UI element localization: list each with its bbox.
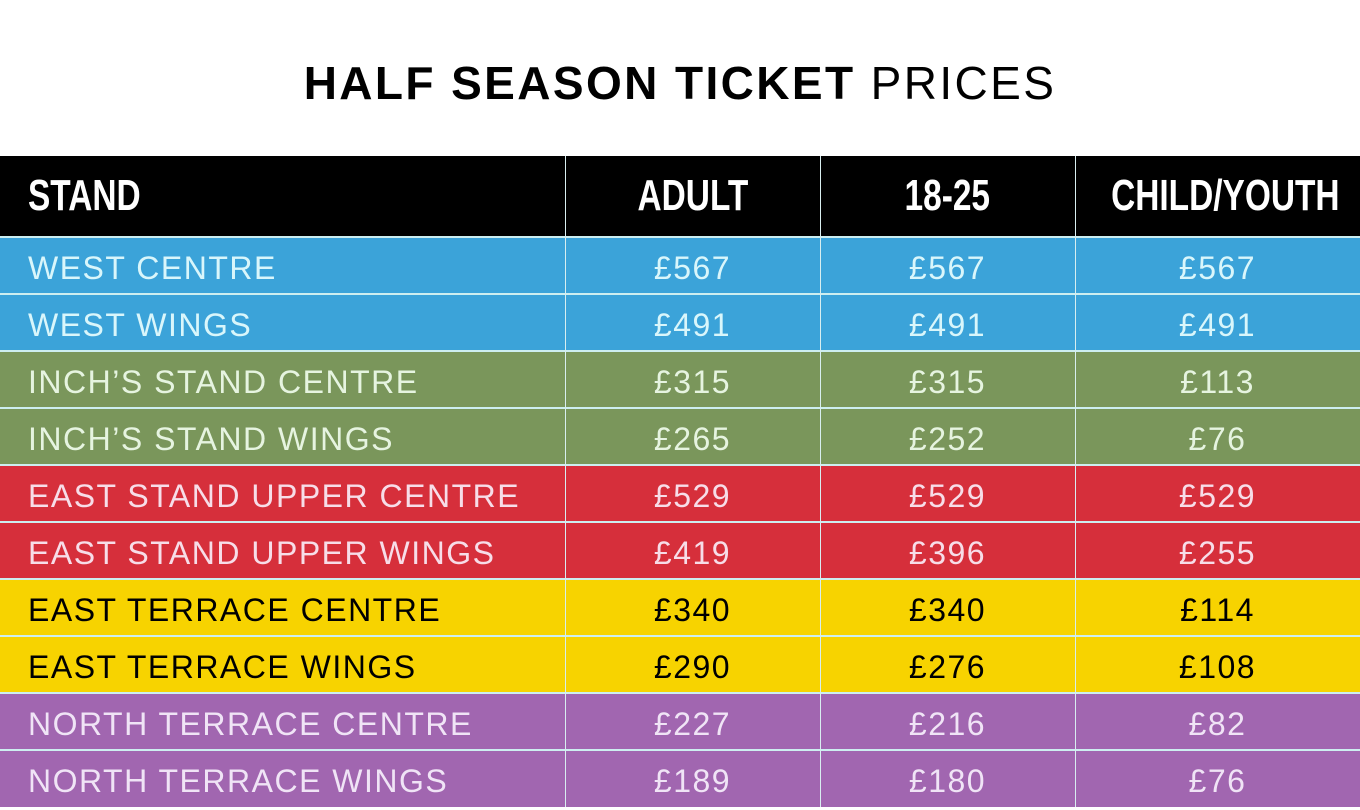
row: north terrace centre: £216 — [909, 706, 986, 742]
row: east terrace wings: £290 — [654, 649, 731, 685]
row: inch's wings: £76 — [1189, 421, 1246, 457]
row: inch's centre: £315 — [909, 364, 986, 400]
row: east terrace centre: £340 — [909, 592, 986, 628]
row: east terrace wings: £108 — [1179, 649, 1256, 685]
row: east upper wings: £419 — [654, 535, 731, 571]
row: inch's wings: INCH’S STAND WINGS — [28, 421, 394, 457]
row: west wings: £491 — [1179, 307, 1256, 343]
row: east upper centre: £529 — [654, 478, 731, 514]
row: west centre — [0, 236, 1360, 293]
header row: STAND — [28, 171, 141, 220]
row: west wings — [0, 293, 1360, 350]
row: east terrace wings: EAST TERRACE WINGS — [28, 649, 417, 685]
row: east terrace wings — [0, 635, 1360, 692]
row: inch's centre — [0, 350, 1360, 407]
row: west wings: £491 — [909, 307, 986, 343]
row: inch's wings: £265 — [654, 421, 731, 457]
header row: CHILD/YOUTH — [1111, 171, 1340, 220]
row: north terrace centre: NORTH TERRACE CENTRE — [28, 706, 473, 742]
row: east terrace centre: £114 — [1180, 592, 1255, 628]
row: inch's wings: £252 — [909, 421, 986, 457]
row: east upper wings: £255 — [1179, 535, 1256, 571]
row: west centre: £567 — [654, 250, 731, 286]
row: north terrace centre: £82 — [1189, 706, 1246, 742]
row: west centre: £567 — [909, 250, 986, 286]
row: inch's centre: £113 — [1180, 364, 1255, 400]
row: north terrace wings — [0, 749, 1360, 807]
row: west centre: £567 — [1179, 250, 1256, 286]
header row — [0, 156, 1360, 236]
header row: 18-25 — [905, 171, 990, 220]
row: north terrace wings: £76 — [1189, 763, 1246, 799]
row: east terrace wings: £276 — [909, 649, 986, 685]
row: west wings: WEST WINGS — [28, 307, 252, 343]
row: east upper centre — [0, 464, 1360, 521]
row: east upper wings — [0, 521, 1360, 578]
row: east upper centre: EAST STAND UPPER CENTRE — [28, 478, 520, 514]
row: north terrace wings: £180 — [909, 763, 986, 799]
row: north terrace wings: NORTH TERRACE WINGS — [28, 763, 448, 799]
row: east upper centre: £529 — [909, 478, 986, 514]
row: north terrace centre: £227 — [654, 706, 731, 742]
row: east terrace centre: EAST TERRACE CENTRE — [28, 592, 441, 628]
title: HALF SEASON TICKET PRICES — [304, 57, 1056, 109]
row: inch's wings — [0, 407, 1360, 464]
row: north terrace wings: £189 — [654, 763, 731, 799]
row: inch's centre: £315 — [654, 364, 731, 400]
row: east terrace centre — [0, 578, 1360, 635]
row: east upper wings: £396 — [909, 535, 986, 571]
row: west wings: £491 — [654, 307, 731, 343]
row: inch's centre: INCH’S STAND CENTRE — [28, 364, 419, 400]
header row: ADULT — [637, 171, 748, 220]
row: east upper wings: EAST STAND UPPER WINGS — [28, 535, 495, 571]
row: east upper centre: £529 — [1179, 478, 1256, 514]
row: north terrace centre — [0, 692, 1360, 749]
row: east terrace centre: £340 — [654, 592, 731, 628]
row: west centre: WEST CENTRE — [28, 250, 277, 286]
